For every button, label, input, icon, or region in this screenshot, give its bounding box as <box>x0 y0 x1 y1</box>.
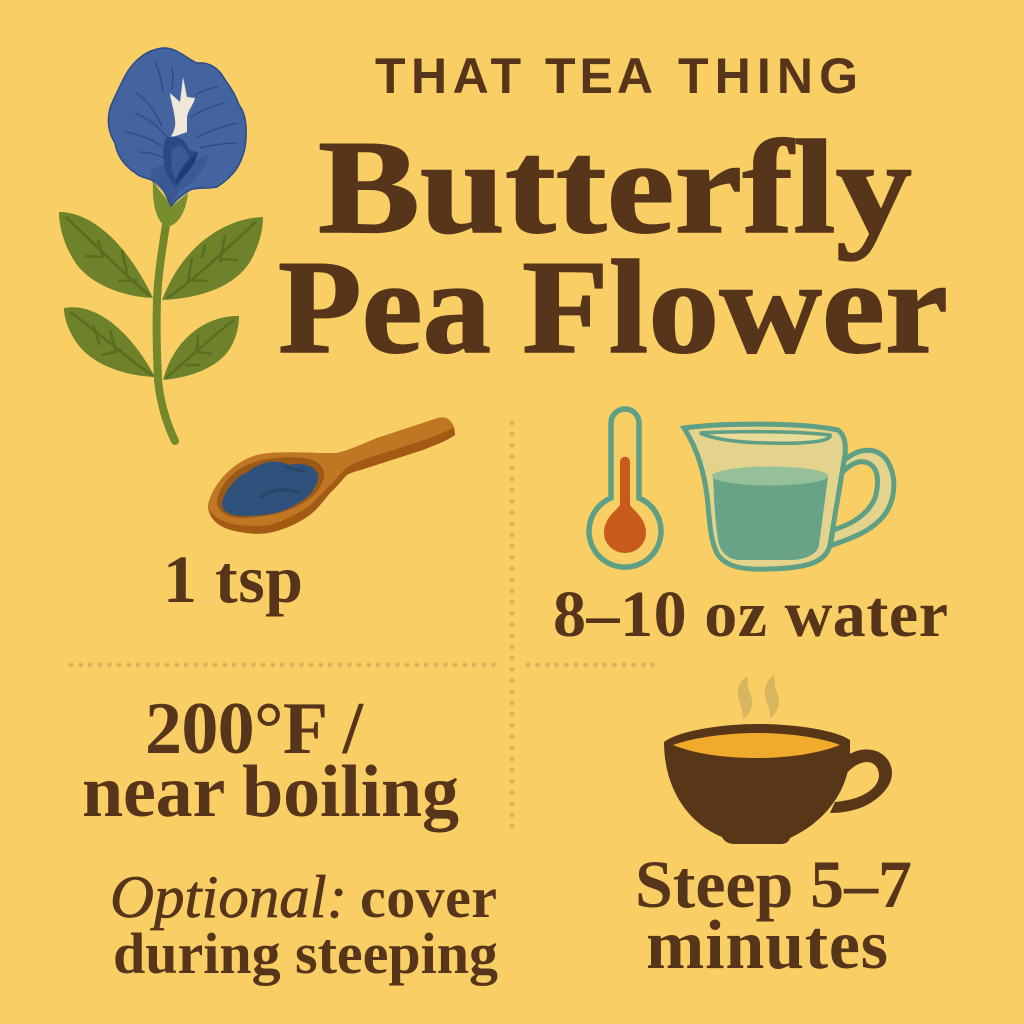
white flower centre <box>170 77 195 138</box>
icon: thermometer <box>589 409 661 567</box>
label: steep time: minutes <box>646 907 888 984</box>
title: Pea <box>278 233 491 381</box>
spoon bowl rim <box>217 457 324 518</box>
tea leaves in spoon <box>222 461 318 516</box>
label: steep time <box>635 846 912 984</box>
label: amount: 1 tsp <box>163 541 303 617</box>
upper left leaf <box>59 212 153 298</box>
eyebrow: brand name: TEA <box>545 48 653 104</box>
icon: measuring cup with water <box>684 424 894 569</box>
label: water amount: 8–10 oz water <box>553 578 948 651</box>
petal veins <box>125 62 237 158</box>
label: temperature <box>82 688 459 833</box>
icon: steam <box>738 675 779 719</box>
icon: tea cup <box>664 724 892 844</box>
label: steep time: Steep 5–7 <box>635 846 912 922</box>
lower right leaf <box>163 316 239 380</box>
lower left leaf <box>64 307 155 377</box>
eyebrow: brand name: THAT <box>375 48 521 104</box>
upper right leaf <box>162 217 263 300</box>
cup body <box>684 424 845 569</box>
cup rim <box>700 432 830 443</box>
flower petal <box>108 48 246 206</box>
note: optional cover: during steeping <box>113 921 498 986</box>
flower keel <box>151 136 208 205</box>
cup handle <box>830 750 892 813</box>
note: optional cover: Optional: <box>110 864 347 930</box>
tea surface <box>673 733 840 758</box>
note: optional cover: cover <box>360 865 497 930</box>
title <box>278 113 948 381</box>
eyebrow: brand name <box>375 48 858 104</box>
note: optional cover <box>110 864 498 986</box>
icon: wooden spoon with tea <box>208 417 455 534</box>
stem <box>157 225 175 441</box>
title: Butterfly <box>318 113 912 261</box>
water <box>713 471 828 560</box>
icon: butterfly pea flower plant <box>59 48 263 441</box>
title: Flower <box>522 233 948 381</box>
label: temperature: 200°F / <box>145 688 364 770</box>
cup handle <box>830 450 894 546</box>
label: temperature: near boiling <box>82 751 459 833</box>
eyebrow: brand name: THING <box>678 48 858 104</box>
cup body <box>664 724 850 844</box>
calyx <box>153 182 188 227</box>
